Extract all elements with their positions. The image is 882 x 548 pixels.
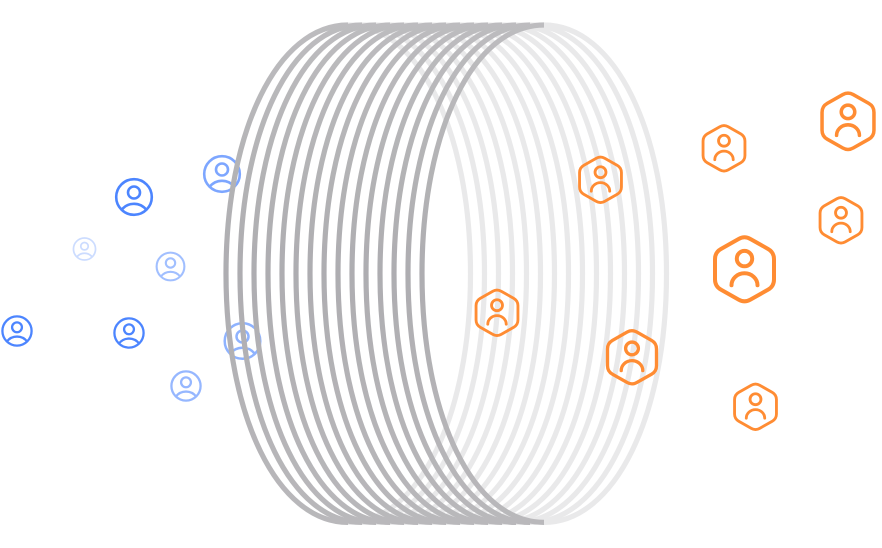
icon: orange hexagon user, lower tunnel <box>608 331 656 384</box>
icon: blue user entering tunnel <box>225 323 260 359</box>
icon: orange hexagon user, right <box>820 198 862 243</box>
icon: orange hexagon user inside tunnel <box>476 290 518 336</box>
icon: blue user, small, faint <box>73 238 96 260</box>
icon: orange hexagon user, bottom <box>735 384 776 430</box>
icon: orange hexagon user, upper middle <box>703 126 745 171</box>
icon: blue user, medium, pale <box>157 253 184 280</box>
icon: blue user, lower <box>171 371 201 401</box>
icon: orange hexagon user, top right <box>822 93 874 149</box>
ring tunnel: near (dark) half of rings <box>226 25 544 522</box>
icon: blue user, far left <box>2 316 32 346</box>
icon: blue user, centre <box>114 318 144 348</box>
icon: orange hexagon user, largest <box>715 237 774 301</box>
icon: blue user, large, near tunnel <box>204 156 240 192</box>
ring tunnel: far (light) half of rings <box>348 25 666 522</box>
icon: orange hexagon user, upper tunnel <box>580 157 621 203</box>
icon: blue user, large, solid <box>116 179 152 215</box>
